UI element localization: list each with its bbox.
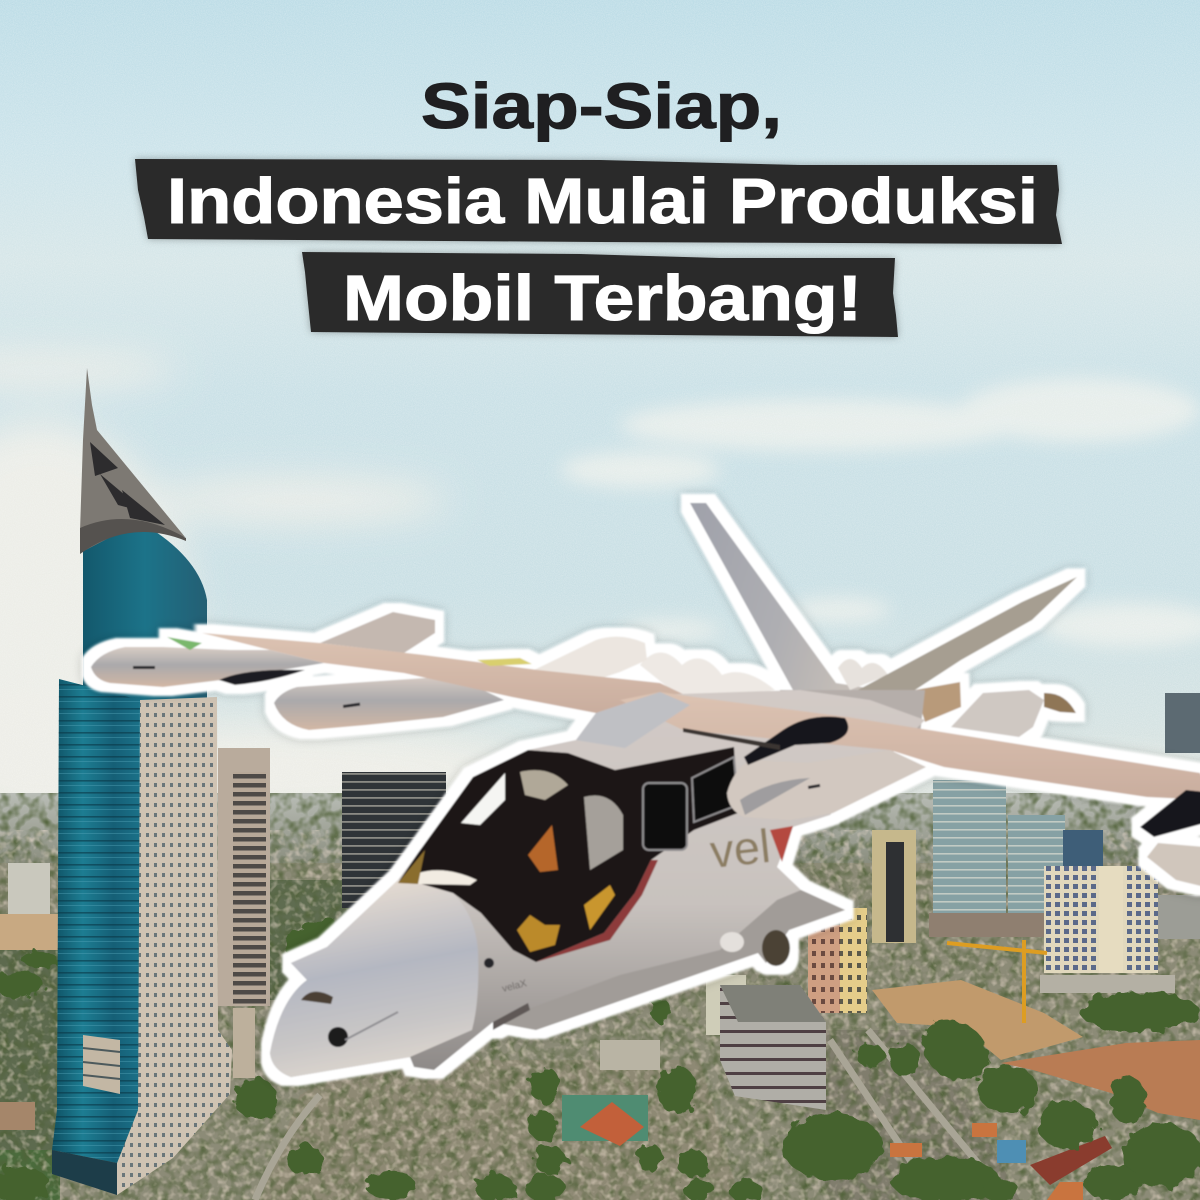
heading line 3 on black tape [302,252,898,337]
left rotor boom A [320,612,435,653]
near rotor pod [683,716,926,820]
roof highlight [576,692,690,748]
background: sky with clouds [0,0,1200,820]
tower: beige block with windows [117,697,232,1195]
Wisma 46 tower [52,368,270,1195]
nose details [301,958,530,1047]
vela logo: vel [708,819,773,878]
white lumps at tail base [838,659,888,690]
red logo mark [770,826,793,862]
far-left rotor pod [534,637,647,682]
heading line 3 on black tape: Mobil Terbang! [343,262,862,334]
tower: crown base band [80,519,186,554]
left rotor pod C [274,676,504,730]
left wing [202,633,720,713]
fuselage [270,690,925,1077]
tower: crown spire and sail [80,368,185,553]
left rotor pod B [91,637,324,687]
cockpit canopy and window band [398,747,738,962]
red trim [536,860,658,962]
tail fin [690,503,880,692]
wheel [762,930,790,966]
far-right rotor pod [915,682,1076,737]
heading line 1: Siap-Siap, [421,70,782,142]
small vela X label: velaX [501,978,528,995]
outer right rotor pod [1140,790,1200,887]
far wing [858,577,1077,710]
rear fuselage behind wing [780,690,925,735]
main wing right [620,692,1200,800]
background: city ground [0,793,1200,1200]
lower sponson [493,890,845,1030]
flying car with white sticker outline [91,503,1200,1077]
sponson highlight [720,932,744,952]
nose [270,879,478,1077]
neighbouring beige tower [218,748,270,1078]
white lumps behind wing [640,652,775,705]
wing yellow patch [477,658,532,666]
tower: glass facade [52,679,140,1195]
cockpit windows [398,757,738,952]
background: city trees [0,921,1200,1200]
background: city buildings [0,693,1200,1200]
tower: blue crown [83,528,207,700]
heading line 2 on black tape: Indonesia Mulai Produksi [167,165,1038,237]
